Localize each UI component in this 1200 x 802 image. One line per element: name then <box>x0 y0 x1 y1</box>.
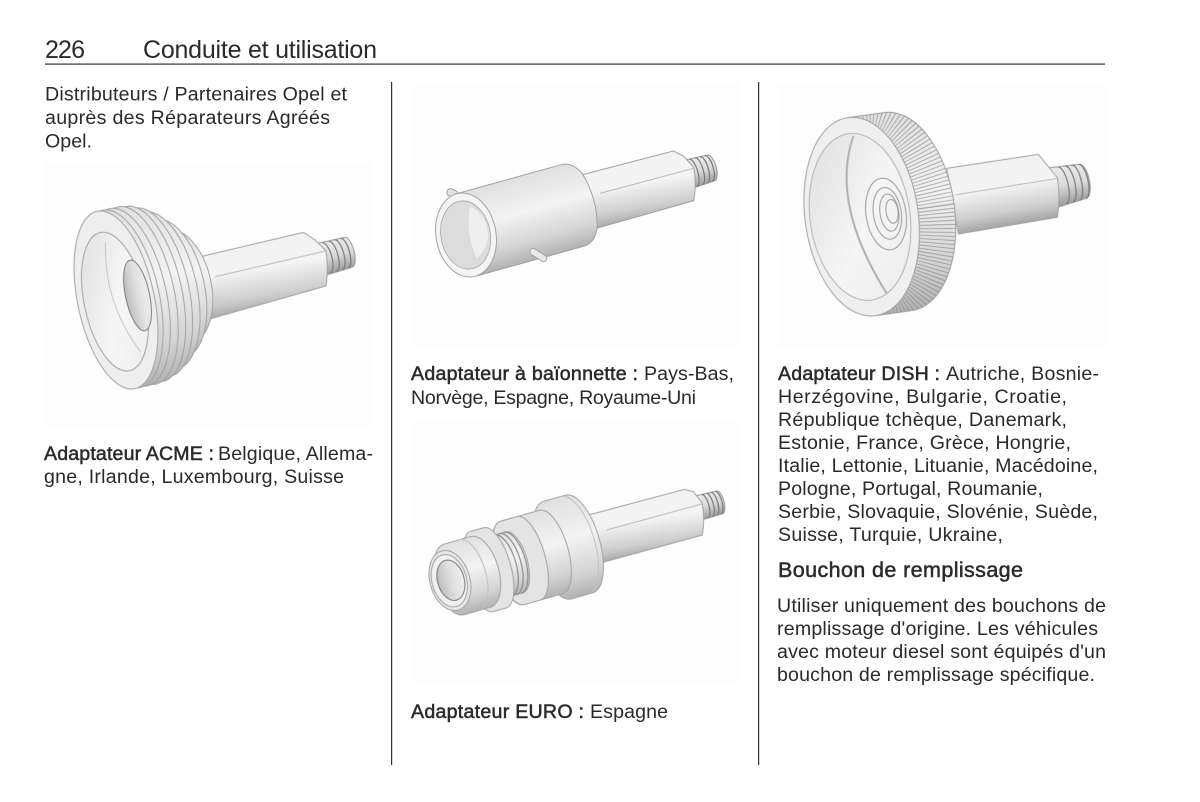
caption: DISH adapter countries <box>778 363 1099 546</box>
intro text <box>45 84 348 152</box>
caption: DISH adapter countries: Estonie, France, Grèce, Hongrie, <box>778 432 1071 454</box>
illustration: EURO adapter <box>411 420 740 684</box>
caption: bayonet adapter: Pays-Bas, <box>644 363 734 385</box>
intro text: Opel. <box>45 130 92 152</box>
illustration: bayonet adapter <box>411 83 740 347</box>
filler cap text: bouchon de remplissage spécifique. <box>777 664 1095 686</box>
illustration: ACME adapter <box>44 162 372 428</box>
section title: Conduite et utilisation <box>143 36 377 64</box>
column dividers <box>391 82 759 765</box>
caption: EURO adapter: Adaptateur EURO : <box>411 701 584 723</box>
intro text: auprès des Réparateurs Agréés <box>45 107 330 129</box>
caption: DISH adapter countries: Pologne, Portugal, Roumanie, <box>778 478 1043 500</box>
caption: DISH adapter countries: Autriche, Bosnie- <box>946 363 1099 385</box>
filler cap text: avec moteur diesel sont équipés d'un <box>777 641 1106 663</box>
caption: DISH adapter countries: Adaptateur DISH : <box>778 363 940 385</box>
filler cap text: Utiliser uniquement des bouchons de <box>777 595 1106 617</box>
caption: ACME adapter: Belgique, Allema- <box>218 443 373 465</box>
caption: ACME adapter: Adaptateur ACME : <box>44 443 214 465</box>
caption: DISH adapter countries: Italie, Lettonie, Lituanie, Macédoine, <box>778 455 1098 477</box>
caption: ACME adapter <box>44 443 373 488</box>
heading: filler cap: Bouchon de remplissage <box>778 558 1023 582</box>
filler cap text: remplissage d'origine. Les véhicules <box>777 618 1098 640</box>
caption: EURO adapter <box>411 701 668 723</box>
caption: ACME adapter: gne, Irlande, Luxembourg, Suisse <box>44 466 344 488</box>
illustration: DISH adapter <box>803 112 1091 317</box>
caption: bayonet adapter: Norvège, Espagne, Royaume-Uni <box>411 387 696 409</box>
caption: bayonet adapter: Adaptateur à baïonnette : <box>411 363 638 385</box>
caption: DISH adapter countries: Serbie, Slovaquie, Slovénie, Suède, <box>778 501 1098 523</box>
caption: DISH adapter countries: République tchèque, Danemark, <box>778 409 1067 431</box>
page header <box>45 36 1105 65</box>
page number: 226 <box>45 36 85 64</box>
caption: DISH adapter countries: Herzégovine, Bulgarie, Croatie, <box>778 386 1067 408</box>
intro text: Distributeurs / Partenaires Opel et <box>45 84 348 106</box>
filler cap text <box>777 595 1106 686</box>
caption: DISH adapter countries: Suisse, Turquie, Ukraine, <box>778 524 1003 546</box>
caption: bayonet adapter <box>411 363 734 409</box>
caption: EURO adapter: Espagne <box>590 701 668 723</box>
